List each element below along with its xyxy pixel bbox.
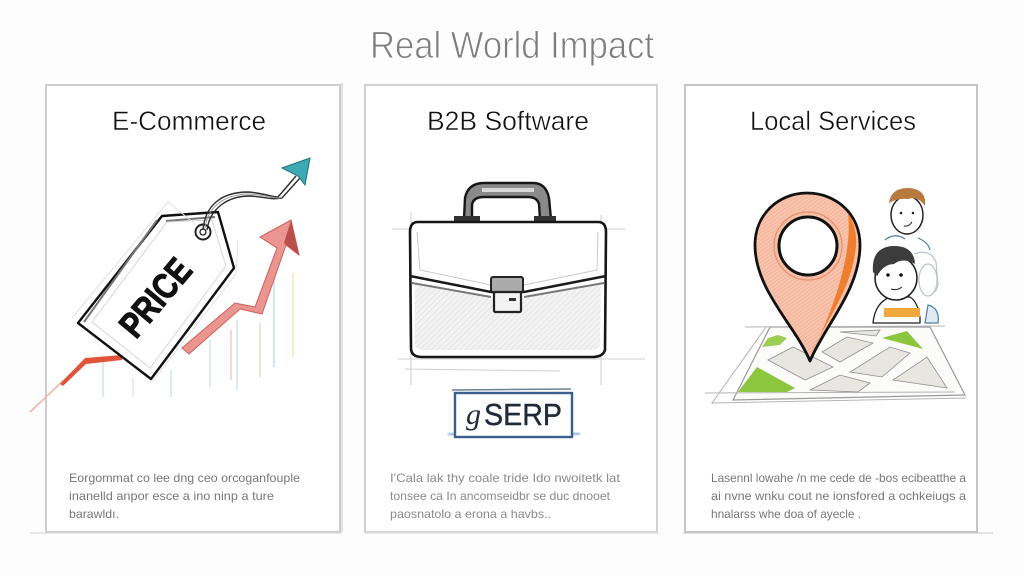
title: Real World Impact [370, 25, 654, 67]
label: price: PRICE [111, 250, 200, 345]
clasp [491, 277, 523, 312]
text block: b2b software: I'Cala lak thy coale tride Ido nwoitetk lat [390, 471, 621, 485]
text block: local services [711, 471, 966, 521]
text block: b2b software [390, 471, 621, 521]
icon: price tag [72, 202, 238, 382]
chart: faded price bars [103, 273, 293, 397]
heading: e-commerce: E-Commerce [112, 106, 266, 136]
heading: b2b software: B2B Software [427, 106, 589, 136]
badge: serp: g [466, 398, 481, 431]
person: front [873, 246, 920, 323]
icon: map pin [755, 193, 860, 361]
text block: b2b software: tonsee ca In ancomseidbr se duc dnooet [390, 489, 611, 503]
panel: e-commerce [30, 83, 342, 533]
text block: e-commerce: Eorgommat co lee dng ceo orcoganfouple [69, 471, 300, 485]
badge: serp [448, 389, 580, 437]
icon: teal arrow and tag string [203, 158, 310, 230]
text block: local services: ai nvne wnku cout ne ionsfored a ochkeiugs a [711, 489, 966, 503]
panel: b2b software [365, 85, 659, 533]
badge: serp: SERP [484, 397, 562, 432]
text block: local services: hnalarss whe doa of ayecle . [711, 507, 861, 521]
text block: b2b software: paosnatolo a erona a havbs.. [390, 507, 551, 521]
person: top [885, 188, 930, 250]
icon: red rising arrow [30, 220, 299, 412]
text block: e-commerce [69, 471, 300, 521]
icon: people [873, 188, 938, 323]
text block: e-commerce: barawldı. [69, 507, 119, 521]
icon: briefcase [392, 183, 645, 385]
heading: local services: Local Services [750, 106, 916, 136]
text block: e-commerce: inanelld anpor esce a ino ninp a ture [69, 489, 274, 503]
text block: local services: Lasennl lowahe /n me cede de -bos ecibeatthe a [711, 471, 966, 485]
panel: local services [683, 85, 993, 533]
icon: street map [705, 326, 966, 403]
person: back, faded [914, 252, 938, 323]
